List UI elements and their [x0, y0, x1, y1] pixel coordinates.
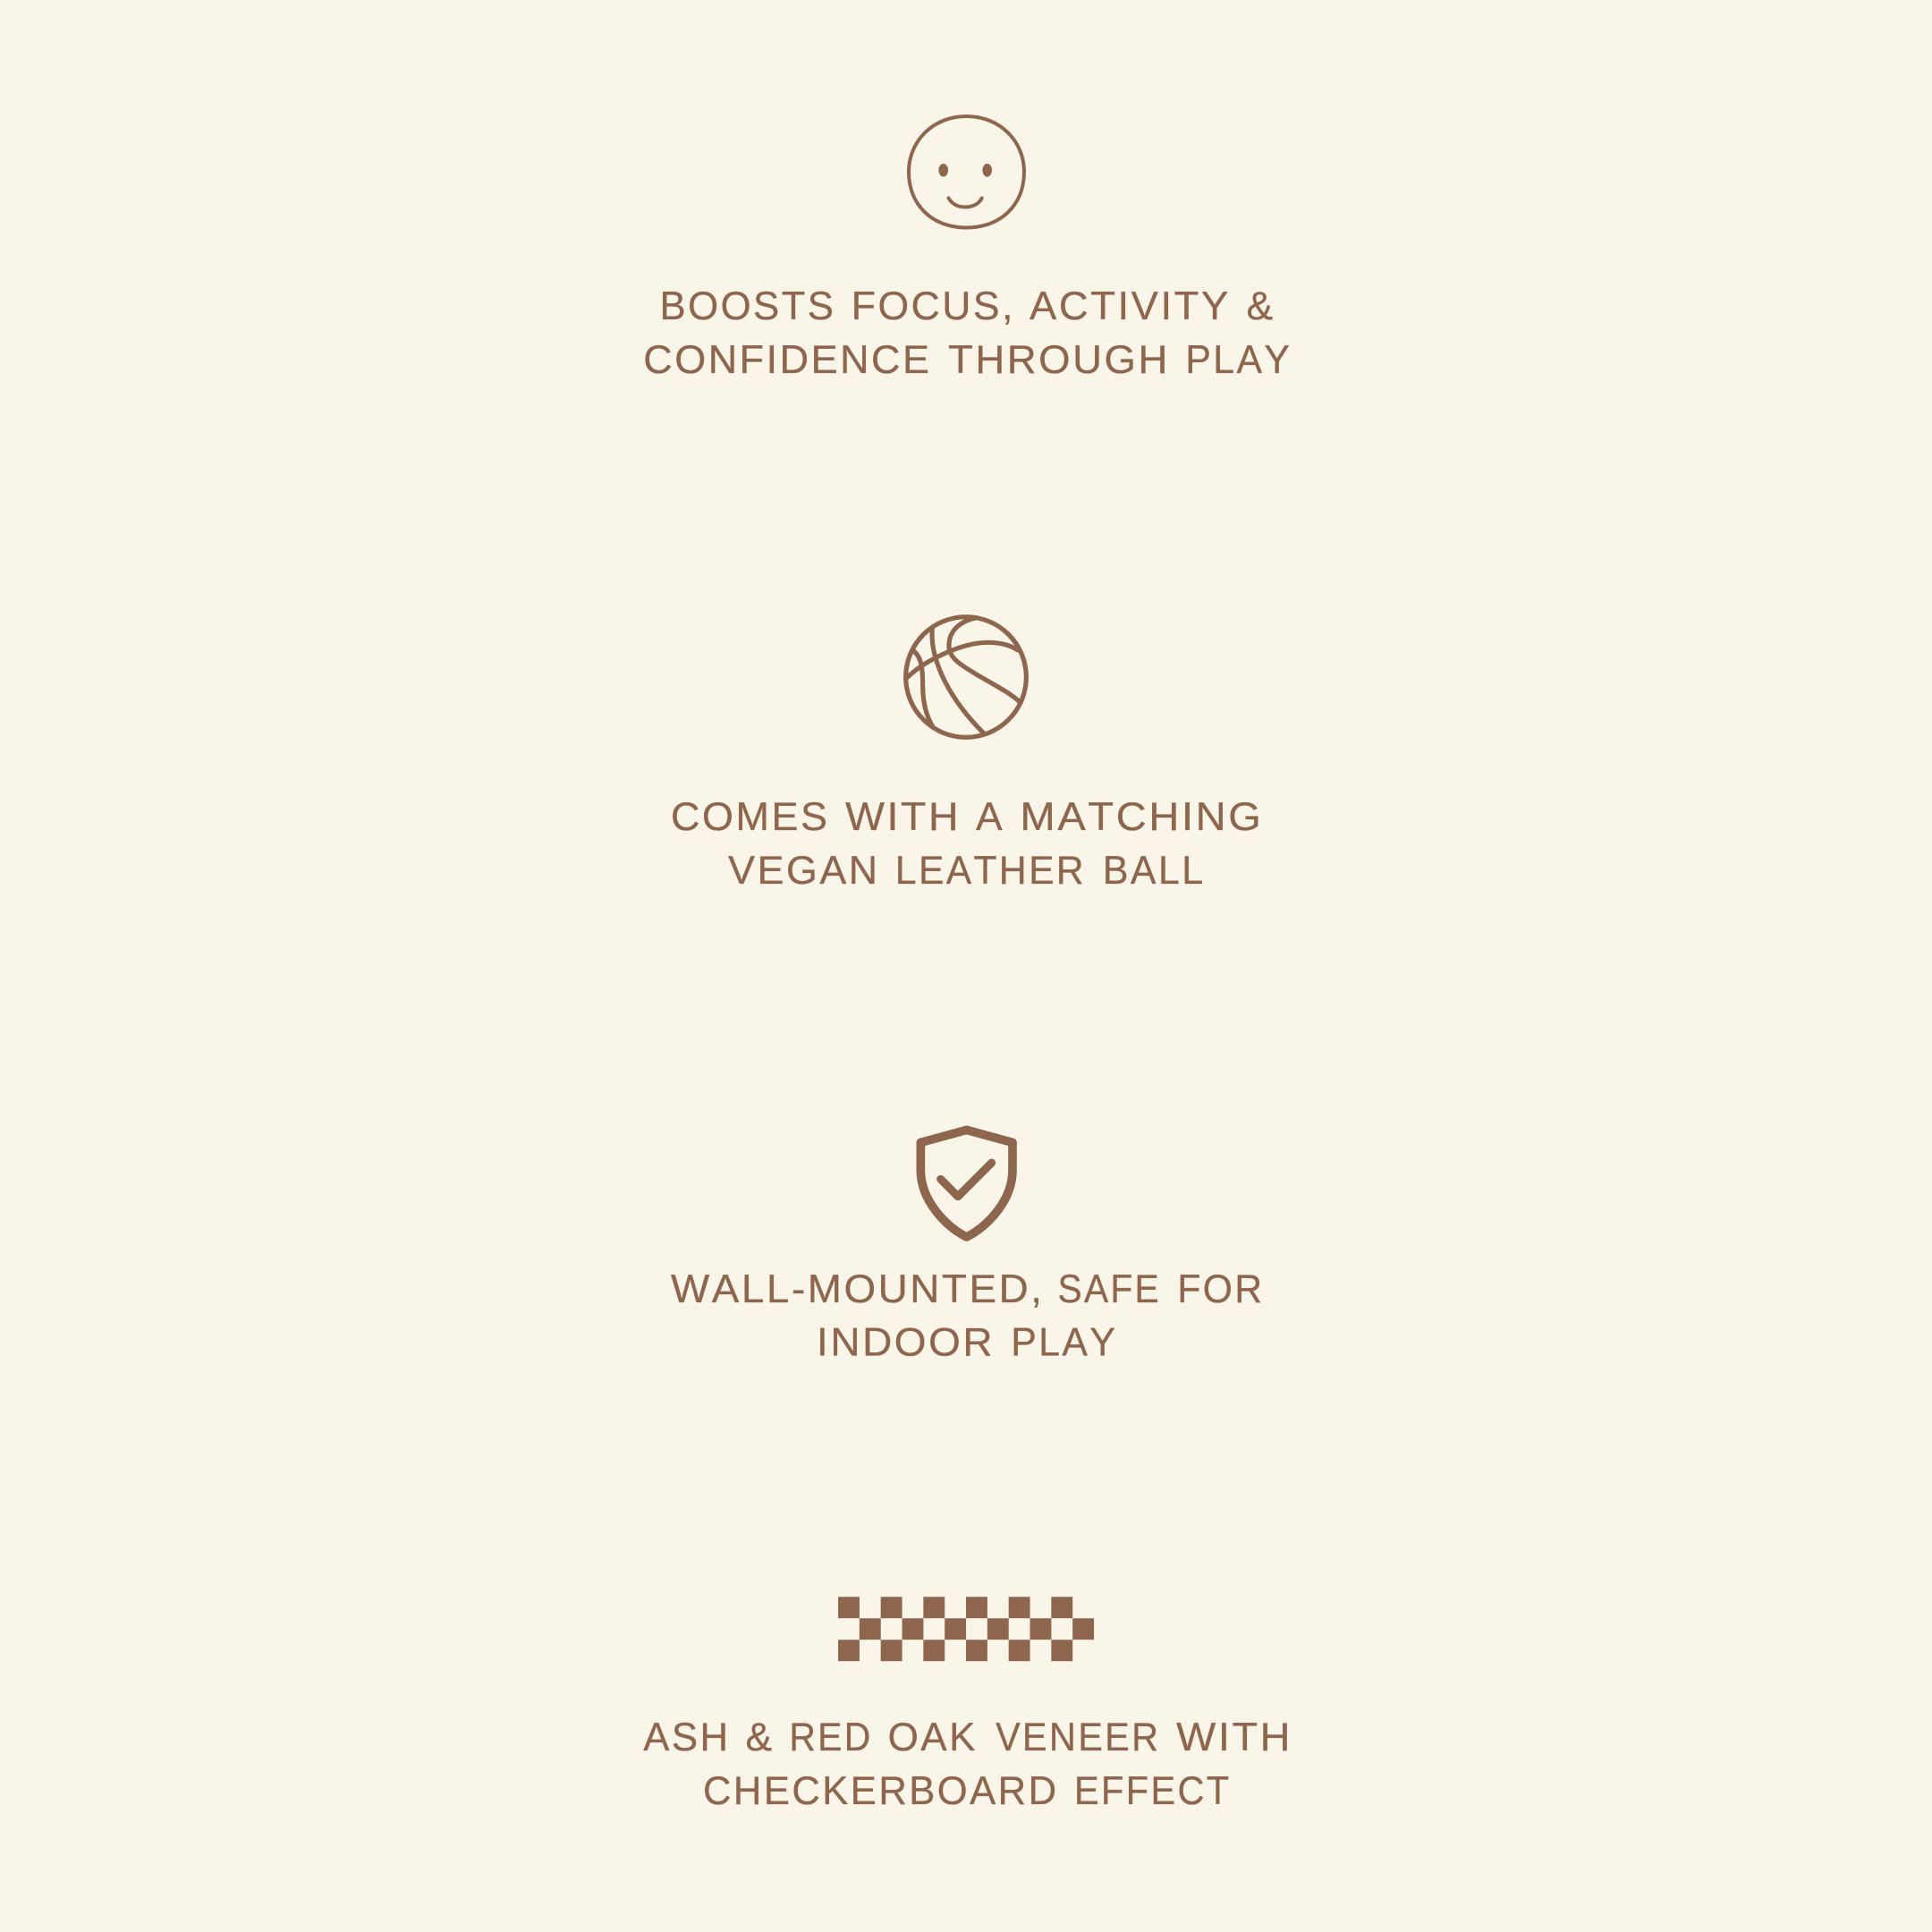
panel: focus feature [643, 116, 1292, 382]
text: veneer feature caption: RED [789, 1716, 873, 1759]
text: focus feature caption: THROUGH [948, 338, 1170, 382]
icon: shield with check [920, 1130, 1013, 1237]
text: veneer feature caption: EFFECT [1074, 1769, 1231, 1813]
text: focus feature caption: PLAY [1185, 338, 1292, 382]
text: ball feature caption: COMES [671, 795, 830, 839]
text: ball feature caption: A [976, 795, 1004, 839]
text: veneer feature caption: & [746, 1716, 775, 1759]
icon: checkerboard strip [838, 1597, 1094, 1661]
text: ball feature caption: WITH [845, 795, 961, 839]
text: focus feature caption: BOOSTS [660, 284, 835, 328]
panel: ball feature [671, 617, 1263, 893]
panel: safety feature [671, 1130, 1265, 1365]
text: veneer feature caption: OAK [888, 1716, 978, 1759]
panel: veneer feature [643, 1597, 1292, 1813]
text: veneer feature caption: VENEER [996, 1716, 1160, 1759]
text: ball feature caption: LEATHER [895, 849, 1086, 893]
icon: basketball [906, 617, 1026, 737]
text: veneer feature caption: WITH [1176, 1716, 1292, 1759]
text: focus feature caption [643, 284, 1292, 382]
text: safety feature caption: PLAY [1011, 1320, 1117, 1365]
text: safety feature caption: SAFE [1057, 1267, 1161, 1311]
text: veneer feature caption [643, 1716, 1292, 1813]
text: ball feature caption: VEGAN [728, 849, 880, 893]
text: safety feature caption: INDOOR [817, 1320, 995, 1365]
text: ball feature caption [671, 795, 1263, 893]
text: focus feature caption: ACTIVITY [1030, 284, 1231, 328]
text: safety feature caption [671, 1267, 1265, 1365]
text: ball feature caption: BALL [1103, 849, 1206, 893]
text: veneer feature caption: CHECKERBOARD [703, 1769, 1059, 1813]
text: safety feature caption: FOR [1177, 1267, 1265, 1311]
text: focus feature caption: & [1247, 284, 1275, 328]
text: ball feature caption: MATCHING [1020, 795, 1263, 839]
text: safety feature caption: WALL-MOUNTED, [671, 1267, 1045, 1311]
text: veneer feature caption: ASH [643, 1716, 731, 1759]
text: focus feature caption: FOCUS, [852, 284, 1015, 328]
icon: smiley face [909, 116, 1024, 227]
text: focus feature caption: CONFIDENCE [643, 338, 932, 382]
